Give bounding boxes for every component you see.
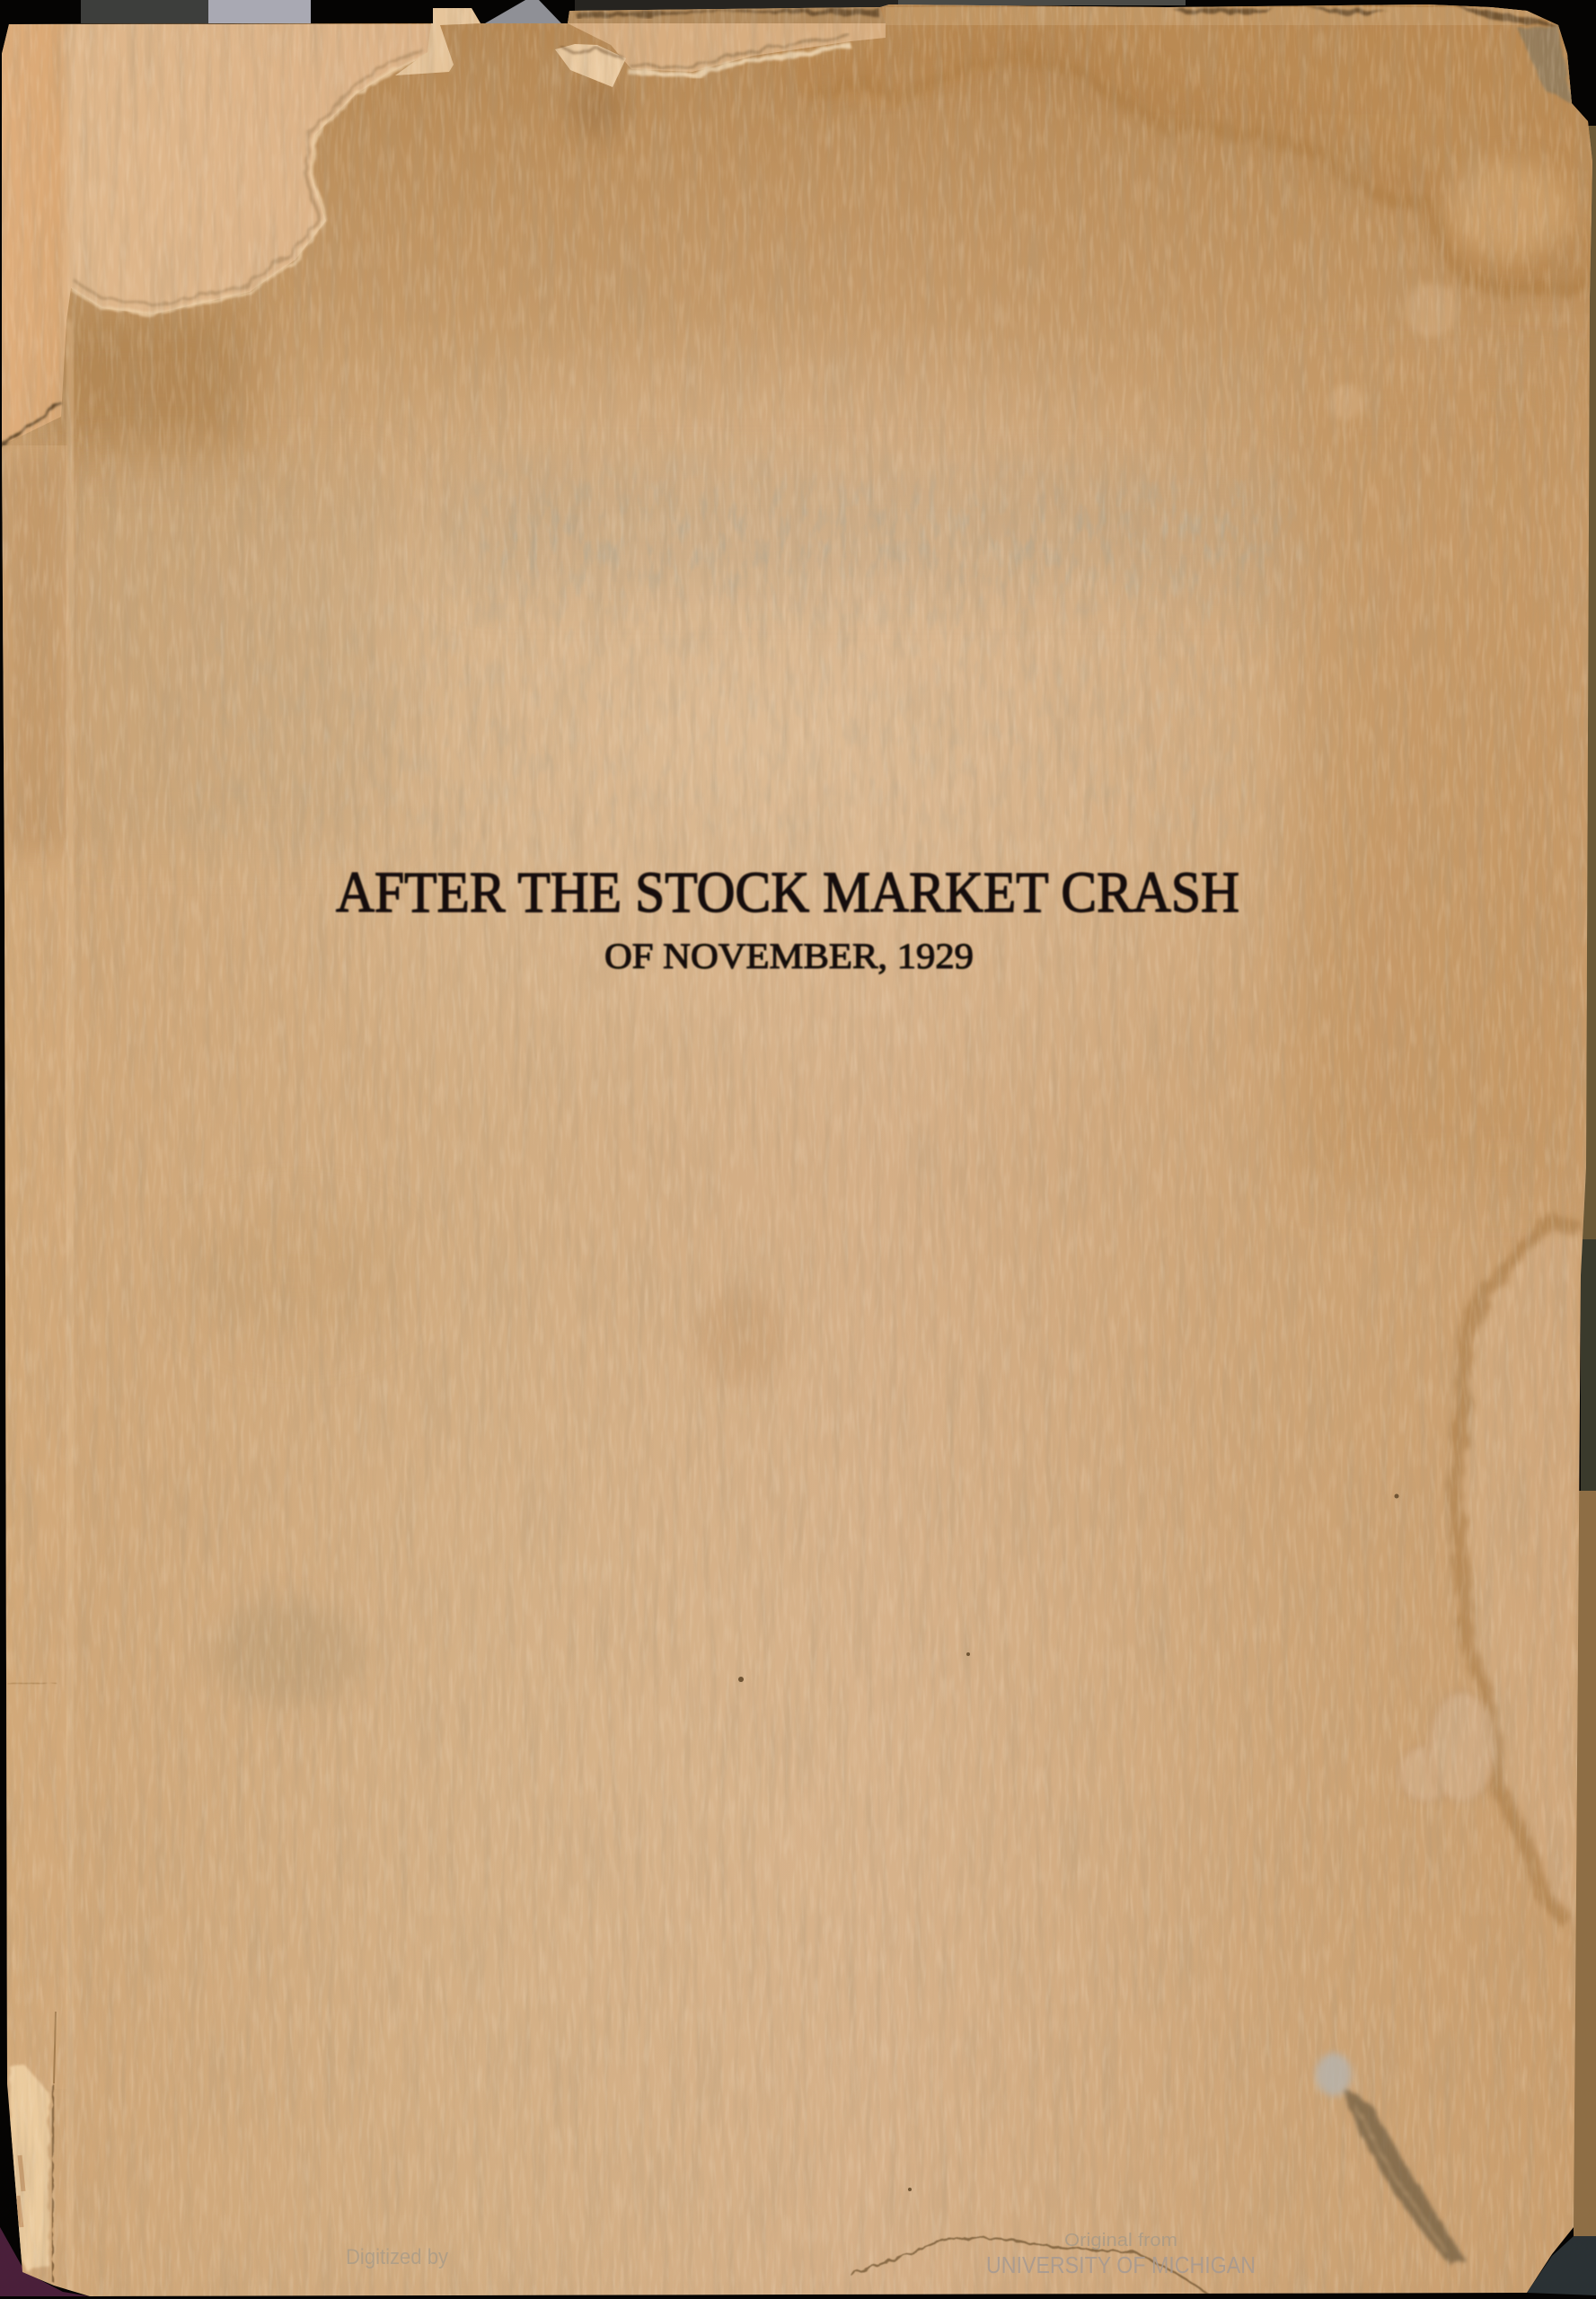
dark fold shadows at top edge	[1172, 5, 1563, 27]
left spine fold	[3, 320, 73, 2295]
spine strip	[3, 445, 67, 2089]
pencil smudge	[1316, 2053, 1464, 2263]
pale region inside stain	[1453, 1221, 1579, 1931]
folded flap shadow	[572, 76, 622, 139]
cream worn strip	[9, 2066, 48, 2272]
darker foxing at the top of the cover	[2, 4, 1592, 460]
lower-left grey patch	[211, 1599, 364, 1706]
flap dark marks	[561, 47, 624, 59]
torn edge rim	[629, 45, 851, 75]
dark smudge body	[1340, 2085, 1464, 2263]
spine crease	[7, 1683, 57, 1684]
stain fill	[772, 9, 1590, 292]
top-right water stain	[772, 5, 1590, 292]
spine upper shading	[3, 458, 67, 853]
pale fold line	[67, 320, 73, 2295]
right water stain	[1398, 1221, 1579, 1931]
grey smudge head	[1316, 2053, 1352, 2096]
rust marks	[18, 2155, 23, 2227]
top edge strip	[886, 7, 1563, 25]
central stain patch	[696, 1289, 786, 1387]
stain tide line	[1455, 1221, 1579, 1920]
torn top-left lighter layer	[0, 24, 437, 445]
right side toning	[1299, 424, 1557, 1173]
left strip crease	[0, 402, 61, 445]
mid-left brown patch	[180, 1212, 413, 1338]
subtitle: OF NOVEMBER, 1929	[604, 936, 974, 976]
grey speckled band	[487, 501, 1177, 565]
torn paper area	[2, 24, 437, 445]
brown shade under the torn corner	[36, 305, 251, 454]
lighter inner corner	[1446, 162, 1572, 260]
stain tide line	[808, 56, 1588, 290]
lighter paper piece	[568, 23, 886, 72]
folded paper flap	[555, 44, 626, 87]
wide soft stain band	[790, 45, 1588, 269]
lower spine dark tear	[52, 2083, 54, 2281]
title: AFTER THE STOCK MARKET CRASH	[336, 860, 1239, 925]
torn edge shadow	[74, 49, 422, 305]
watermark: original from: Original from	[1064, 2231, 1177, 2251]
speckle over the grey band	[467, 476, 1293, 593]
back paper strip	[568, 7, 886, 23]
small cream tear	[395, 8, 481, 75]
lobed pale blob	[1398, 1691, 1496, 1802]
worn corner	[1518, 25, 1572, 103]
watermark: university of michigan: UNIVERSITY OF MICHIGAN	[986, 2251, 1256, 2278]
light centre glow	[422, 576, 1186, 927]
pale streak through smudge	[1356, 2106, 1448, 2254]
torn top-middle layer	[395, 7, 886, 139]
torn edge pale rim	[71, 55, 428, 314]
bottom crack	[851, 2239, 1210, 2295]
top edge pale line	[886, 23, 1545, 25]
small dark specks	[738, 1494, 1399, 2191]
lower centre glow	[36, 1239, 1401, 2299]
dark fold	[575, 9, 880, 18]
speckle upper-middle area	[180, 593, 1257, 862]
torn edge shadow	[629, 36, 851, 66]
spine crack line	[54, 2012, 56, 2083]
light spots top right	[1327, 283, 1459, 420]
left grey band	[72, 467, 395, 844]
watermark: digitized by: Digitized by	[346, 2245, 448, 2269]
